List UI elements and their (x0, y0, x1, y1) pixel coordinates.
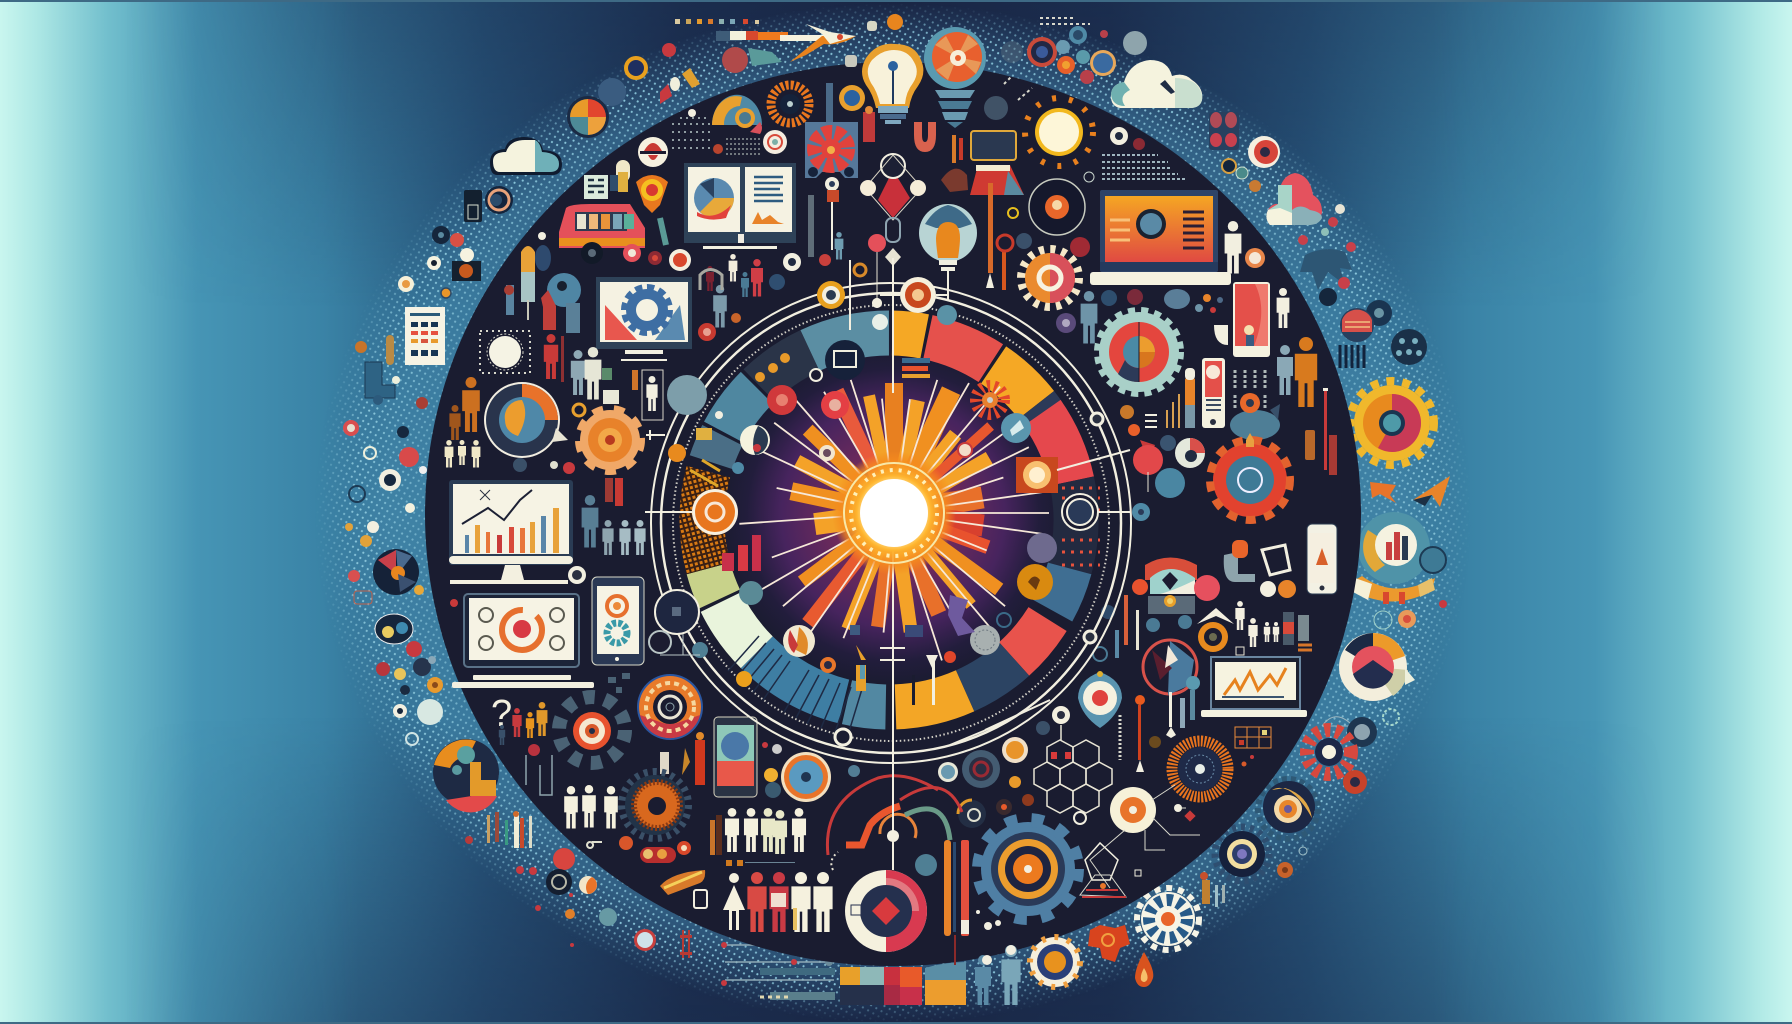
icon: monitor with chart (449, 480, 573, 584)
icon: orange starburst disc (1172, 741, 1228, 797)
icon: cream dark gear (1258, 779, 1318, 839)
band icon: compass outline (1322, 717, 1352, 726)
small textured (1016, 233, 1090, 257)
node: purple swirl (948, 595, 975, 636)
band icon: outlined ball right (1420, 547, 1446, 573)
segment stripes (728, 636, 862, 735)
band small dot (414, 585, 424, 595)
dash arc (831, 852, 838, 870)
icon: bars at top of wheel (902, 358, 930, 378)
icon: hot dog (660, 870, 705, 895)
icon: rocket (716, 24, 856, 62)
band icon: dark ball (432, 226, 450, 244)
icon: detailed donut (637, 674, 703, 740)
red coral balls (1132, 575, 1220, 601)
band small icons right middle (1374, 600, 1447, 629)
icon: white phone right (1307, 524, 1337, 594)
band icon: outline box (354, 591, 372, 604)
band small balls lower (376, 641, 443, 695)
icon: capped house (1145, 558, 1197, 614)
band red balls lower (465, 836, 575, 947)
icon: people outlines (526, 755, 552, 795)
icon: bus (559, 204, 645, 264)
icon: bulb in circle (919, 204, 977, 300)
connector top left (646, 430, 665, 440)
icon: red flower plate (805, 122, 858, 178)
band chart: small bars (487, 811, 532, 848)
icon: hexagon molecule (1034, 725, 1112, 813)
panel: disc upper-left icons (445, 14, 926, 584)
small red pills (1120, 405, 1157, 436)
icon: small white phone (1202, 358, 1225, 428)
icon: cloud left (490, 137, 562, 175)
band small dots left (343, 376, 428, 474)
dotted texture balls (984, 41, 1023, 120)
block icons bottom (820, 625, 956, 705)
node: small ring below (649, 631, 708, 658)
ring icon (783, 253, 801, 271)
icon: candle (521, 246, 535, 320)
small dashed bars (808, 195, 814, 257)
icon: blue key disc (541, 273, 581, 333)
icon: stacked lamp base (935, 90, 975, 128)
small arch (700, 270, 722, 290)
icon: stick with dial (819, 177, 839, 266)
icon: pie gear pale (1098, 311, 1180, 393)
icon: central sun (832, 451, 956, 575)
small key (587, 842, 602, 848)
node: diamond badge (958, 443, 972, 457)
icon: text lines (726, 139, 760, 154)
node: small ring (810, 369, 822, 381)
small ball blue near gauge (915, 854, 937, 876)
band icon: red ball (662, 43, 676, 57)
icon: phone gear (714, 717, 757, 797)
icon: laptop with line chart (1201, 657, 1307, 717)
band icon: orange blob (355, 341, 367, 353)
small red badge (528, 744, 540, 756)
node: white dot top (872, 298, 882, 308)
connector right (1057, 450, 1130, 512)
band icon: gold ring (624, 56, 648, 80)
band icon: blue textured ball (598, 78, 626, 106)
chart: large donut with block (433, 739, 499, 812)
small red dot (713, 144, 723, 154)
band icon: textured red ball (722, 47, 748, 73)
icon: white blue flower (1137, 888, 1199, 950)
band icon: pale ball (417, 699, 443, 725)
panel: disc lower-right icons (900, 524, 1337, 1005)
hex nodes (1036, 706, 1071, 759)
small rings near donut (513, 404, 623, 506)
bottom squares right (900, 962, 966, 1005)
icon: location pin (1078, 671, 1122, 728)
small textured trio (1056, 289, 1190, 333)
node: teal ball left (732, 462, 744, 474)
icon: tablet (592, 577, 644, 665)
small ring group (958, 794, 1034, 828)
icon: figure stub (504, 285, 514, 315)
icon: yellow gear donut (1350, 381, 1434, 465)
ring small lower (568, 566, 586, 584)
band dots lower (760, 996, 788, 998)
icon: small tablet outline (694, 890, 707, 908)
icon: spiky orange ring (771, 85, 809, 123)
band small icons lower right (1200, 847, 1307, 907)
icon: calendar (405, 307, 445, 365)
band icon: dark ring (379, 469, 401, 491)
textured ball (769, 274, 785, 290)
people group: red and white (706, 254, 763, 328)
icon: cream red ball (638, 137, 668, 167)
icon: flame (1135, 952, 1153, 987)
icon: sun gear (580, 410, 640, 470)
textured blue pill (535, 245, 551, 271)
small square outline (1236, 647, 1244, 655)
panel: halftone outer band (315, 3, 1471, 1023)
node: grey coin (970, 625, 1000, 655)
node: textured globe (667, 375, 707, 415)
cluster balls center bottom (938, 737, 1028, 788)
node: grey purple ball (1027, 533, 1057, 563)
bottom squares left (840, 967, 900, 1005)
icon: gear with spokes (559, 697, 625, 763)
red stem (954, 935, 956, 965)
icon: ring small (1110, 127, 1128, 145)
people: orange and cream (445, 377, 480, 468)
icon: cream gear bottom (1030, 937, 1080, 987)
node: blue ball (739, 581, 763, 605)
small dots duo (1260, 580, 1296, 598)
band icon: device (464, 190, 482, 222)
band icon: small bars (660, 68, 700, 104)
icon: small figures orange dark (710, 815, 795, 866)
band icon: red striped dome (1340, 308, 1374, 368)
icon: navy gear (1215, 827, 1269, 881)
balloon and diamond (854, 234, 901, 308)
node: orange white circle top (900, 277, 936, 313)
ball teal (848, 765, 860, 777)
sticks cluster (1101, 595, 1192, 658)
small figures (1235, 601, 1312, 650)
rays wide (791, 383, 999, 632)
node: cream half ball (740, 425, 770, 455)
icon: molecule (860, 154, 926, 242)
panel: disc lower-left icons (450, 512, 938, 1005)
icon: orange blue disc (781, 752, 831, 802)
band icon: red ball small (450, 233, 464, 247)
people blue bottom (975, 945, 1021, 1005)
icon: lightbulb top (862, 44, 923, 124)
band icon: dark ring ball (546, 869, 572, 895)
band small rings upper right (1222, 159, 1261, 192)
icon: thin ring with orange (1029, 179, 1085, 235)
people cream three (564, 785, 618, 828)
node: teal ball top (937, 305, 957, 325)
icon: qr square (584, 175, 608, 199)
connector bottom right (950, 700, 1050, 745)
small ring outline (1084, 172, 1094, 182)
arrow: orange up right (1413, 476, 1450, 507)
icon: cloud right (1111, 60, 1202, 108)
chart: fan arc (1353, 576, 1435, 604)
small white dot (538, 232, 546, 240)
text-like persons (1235, 370, 1265, 410)
node: red pale ball (821, 391, 849, 419)
icon: cream orange circle (1090, 785, 1200, 888)
small orange ball top (887, 14, 903, 30)
people pair left (544, 334, 601, 400)
small red orange dots (698, 313, 741, 341)
icon: orange gear blob (1230, 393, 1280, 440)
icon: red dots ball row (648, 249, 691, 271)
node: gold ring top (817, 281, 845, 309)
chart: pie on band (567, 96, 609, 138)
icon: dotted grid (672, 118, 712, 148)
icon: figure red tall (660, 732, 705, 785)
node: dark white ring (1062, 494, 1098, 530)
small orange ring right (1245, 248, 1265, 268)
node: starburst (976, 386, 1004, 414)
small lines (1004, 18, 1090, 100)
dotted top row (675, 19, 759, 24)
band icon: triangle (1405, 668, 1415, 685)
icon: red shield (1088, 925, 1130, 962)
band icon: ladder (680, 930, 692, 958)
band icon: cream dot (398, 276, 414, 292)
panel: central dark disc (425, 62, 1361, 966)
band icon: red white lens (1248, 136, 1280, 168)
icon: dotted box with ring (480, 331, 530, 373)
node: ray ring (819, 445, 835, 461)
icon: stick lines (986, 183, 1018, 290)
icon: red ring shield (1143, 640, 1200, 695)
small dark red ball (1133, 138, 1145, 150)
band icon: slab (748, 48, 782, 66)
icon: magnet (914, 122, 936, 152)
band icon: colourful dark capsule (375, 614, 413, 644)
band icon: blue ball (599, 908, 617, 926)
panel: disc upper-right icons (914, 18, 1337, 520)
ball blue (1093, 647, 1107, 661)
band chart: bottom lines (721, 942, 835, 1000)
band icon: orange ring (441, 288, 451, 298)
icon: gauge arcs (827, 512, 938, 855)
icon: bar chart donut (1358, 512, 1430, 584)
band icon: outlined circle (406, 733, 418, 745)
icon: presentation lamp (941, 131, 1024, 195)
icon: red tower (863, 106, 875, 142)
node: teal right (1132, 503, 1150, 521)
icon: film reel gold (826, 83, 865, 123)
node: white ring right bottom (1084, 631, 1096, 643)
small links (608, 676, 630, 690)
icon: monitor with gear (596, 277, 692, 361)
icon: camera (452, 248, 481, 281)
chart: big donut (484, 382, 568, 458)
icon: orange ring (1198, 622, 1228, 652)
icon: fan disc (924, 27, 986, 89)
node: orange square (1016, 457, 1058, 493)
icon: red spoked gear (1307, 730, 1351, 774)
people lower row (723, 872, 833, 932)
chart: dark pie (373, 549, 419, 595)
node: dark ball with ring (655, 590, 699, 634)
icon: laptop with target (452, 594, 594, 688)
icon: tall stick right (1305, 388, 1337, 475)
vertical spine (850, 258, 905, 870)
small dots (1242, 755, 1254, 766)
band icon: outlined ring (349, 486, 365, 502)
icon: monitor with report (684, 163, 796, 249)
icon: red gear globe (1210, 433, 1290, 520)
icon: chair device (1224, 540, 1290, 582)
icon: small bar and stick (1167, 368, 1195, 428)
node: multi ball (783, 625, 815, 657)
segment dots and marks (690, 314, 888, 486)
band icon: blue blocks (365, 362, 395, 398)
node: white ring bottom (835, 729, 851, 745)
node: orange circle left (692, 489, 738, 535)
people cream row (725, 808, 806, 854)
chart: pie with peak (1339, 633, 1408, 701)
icon: big navy red target donut (845, 870, 927, 952)
icon: house chevron (1197, 608, 1234, 624)
people red orange (499, 702, 547, 745)
small dot cluster (1195, 294, 1228, 345)
band icon: pink pills (1209, 112, 1239, 150)
icon: small scribble (845, 21, 877, 67)
band red dots right (1298, 204, 1356, 252)
node: presentation badge (825, 340, 865, 380)
right grid lines in dark segment (1062, 488, 1100, 565)
rays thin (739, 380, 1049, 660)
icon: padlock (610, 160, 630, 192)
band icon: dark textured ball (1391, 329, 1427, 365)
connector left (645, 511, 692, 513)
icon: blue gear big (979, 820, 1077, 918)
icon: cream red target (763, 130, 787, 154)
icon: yellow sun (1025, 98, 1093, 166)
small white dots (976, 910, 1001, 930)
icon: small grid chart (1235, 727, 1271, 748)
icon: orange shield badge (636, 175, 668, 245)
band icon: blue creature (1300, 249, 1352, 290)
small red figure (450, 599, 458, 607)
node: red ball (767, 385, 797, 415)
band small icons (345, 503, 415, 582)
band icon: white ring lower (393, 704, 407, 718)
band icon: ring target (1347, 717, 1377, 747)
arrow: orange left (1370, 482, 1396, 503)
band icon: tall pill (386, 335, 394, 365)
chart: red bars (722, 535, 761, 571)
connector top (880, 294, 947, 296)
icon: side bars (952, 135, 963, 163)
panel: outer band icons (343, 19, 1450, 1000)
icon: orange figure frame (602, 368, 663, 420)
node: white ring right top (1091, 413, 1103, 425)
icon: molecule lower and triangle (1074, 812, 1141, 897)
panel: central radial wheel (625, 256, 1153, 870)
node: small teal ring lower (997, 613, 1011, 627)
icon: dark orange iris gear (622, 772, 688, 838)
sticks white below ring (1166, 690, 1195, 738)
band icon: red seal (1343, 770, 1367, 794)
people white right (1081, 221, 1317, 407)
icon: orange stick with lines (1120, 695, 1145, 772)
node: orange small lower (736, 671, 752, 687)
icon: laptop orange (1090, 190, 1231, 285)
icon: red phone (1233, 282, 1270, 357)
node: orange small (668, 444, 686, 462)
band icon: lens (634, 929, 656, 951)
icon: vertical bars near donut (900, 788, 969, 936)
figure grey (835, 232, 843, 260)
node: amber ball (1017, 564, 1053, 600)
inner purple field (721, 343, 1065, 687)
people grey left of ring (582, 495, 646, 555)
band icon: white ring (427, 256, 441, 270)
node: glass ball (1001, 413, 1031, 443)
band icon: orange cream ball (579, 876, 597, 894)
text: question mark: ? (491, 693, 512, 735)
ring segments (625, 256, 1153, 784)
small balls (762, 742, 782, 798)
band icon: teal wreath (1383, 709, 1399, 725)
icon: red capsule (619, 836, 691, 863)
text-like dash lines (1102, 155, 1186, 179)
icon: sun gear cream (1022, 250, 1078, 306)
icon: cluster of rings (1027, 26, 1147, 84)
band icon: spiral ring (485, 186, 513, 214)
outer rings (651, 283, 1131, 763)
small dark figure (1149, 736, 1161, 748)
icon: balloons cluster (1133, 435, 1205, 498)
icon: red teal heart cloud (1266, 173, 1322, 225)
small ball (688, 109, 696, 117)
chart: half donut (712, 95, 762, 134)
band icon: dark balls (1319, 277, 1392, 326)
